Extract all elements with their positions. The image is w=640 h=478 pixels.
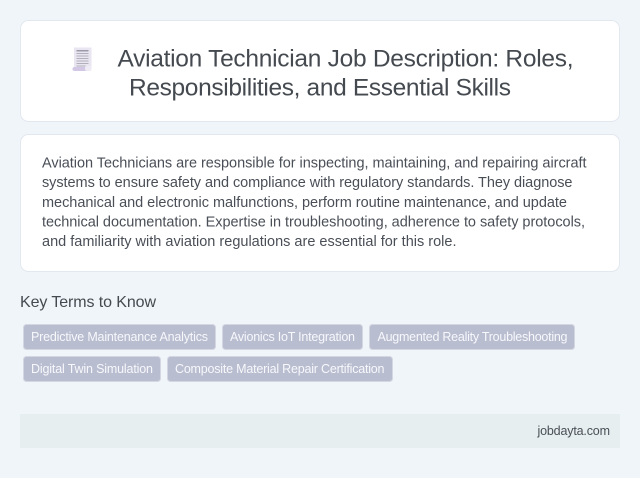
tag: predictive maintenance analytics: Predictive Maintenance Analytics (31, 330, 208, 344)
tag: digital twin simulation: Digital Twin Simulation (31, 362, 153, 376)
tag: composite material repair certification (168, 356, 392, 382)
title (118, 46, 574, 102)
tags: key terms list (24, 324, 574, 382)
footer source text: jobdayta.com (536, 424, 610, 438)
title: Aviation Technician Job Description: Roles, (118, 46, 574, 72)
panel: title header (20, 20, 620, 122)
text block: description paragraph: and familiarity with aviation regulations are essential for this role. (42, 234, 456, 250)
icon: document scroll (72, 48, 92, 71)
text block: description paragraph: technical documentation. Expertise in troubleshooting, adherence to safety protocols, (42, 214, 585, 230)
tag: composite material repair certification: Composite Material Repair Certification (175, 362, 385, 376)
tag: augmented reality troubleshooting (370, 324, 574, 350)
text block: description paragraph: Aviation Technicians are responsible for inspecting, maintaining, and repairing aircraft (42, 156, 586, 172)
title: Responsibilities, and Essential Skills (129, 74, 511, 102)
text block: description paragraph: systems to ensure safety and compliance with regulatory standards. They diagnose (42, 175, 572, 191)
tag: predictive maintenance analytics (24, 324, 216, 350)
panel: description (20, 134, 620, 272)
heading: key terms: Key Terms to Know (20, 294, 156, 311)
footer bar (20, 414, 620, 448)
tag: digital twin simulation (24, 356, 160, 382)
text block: description paragraph (42, 156, 586, 250)
tag: augmented reality troubleshooting: Augmented Reality Troubleshooting (378, 330, 568, 344)
text block: description paragraph: mechanical and electronic malfunctions, perform routine maintenance, and update (42, 195, 567, 211)
tag: avionics iot integration: Avionics IoT Integration (230, 330, 355, 344)
tag: avionics iot integration (222, 324, 362, 350)
